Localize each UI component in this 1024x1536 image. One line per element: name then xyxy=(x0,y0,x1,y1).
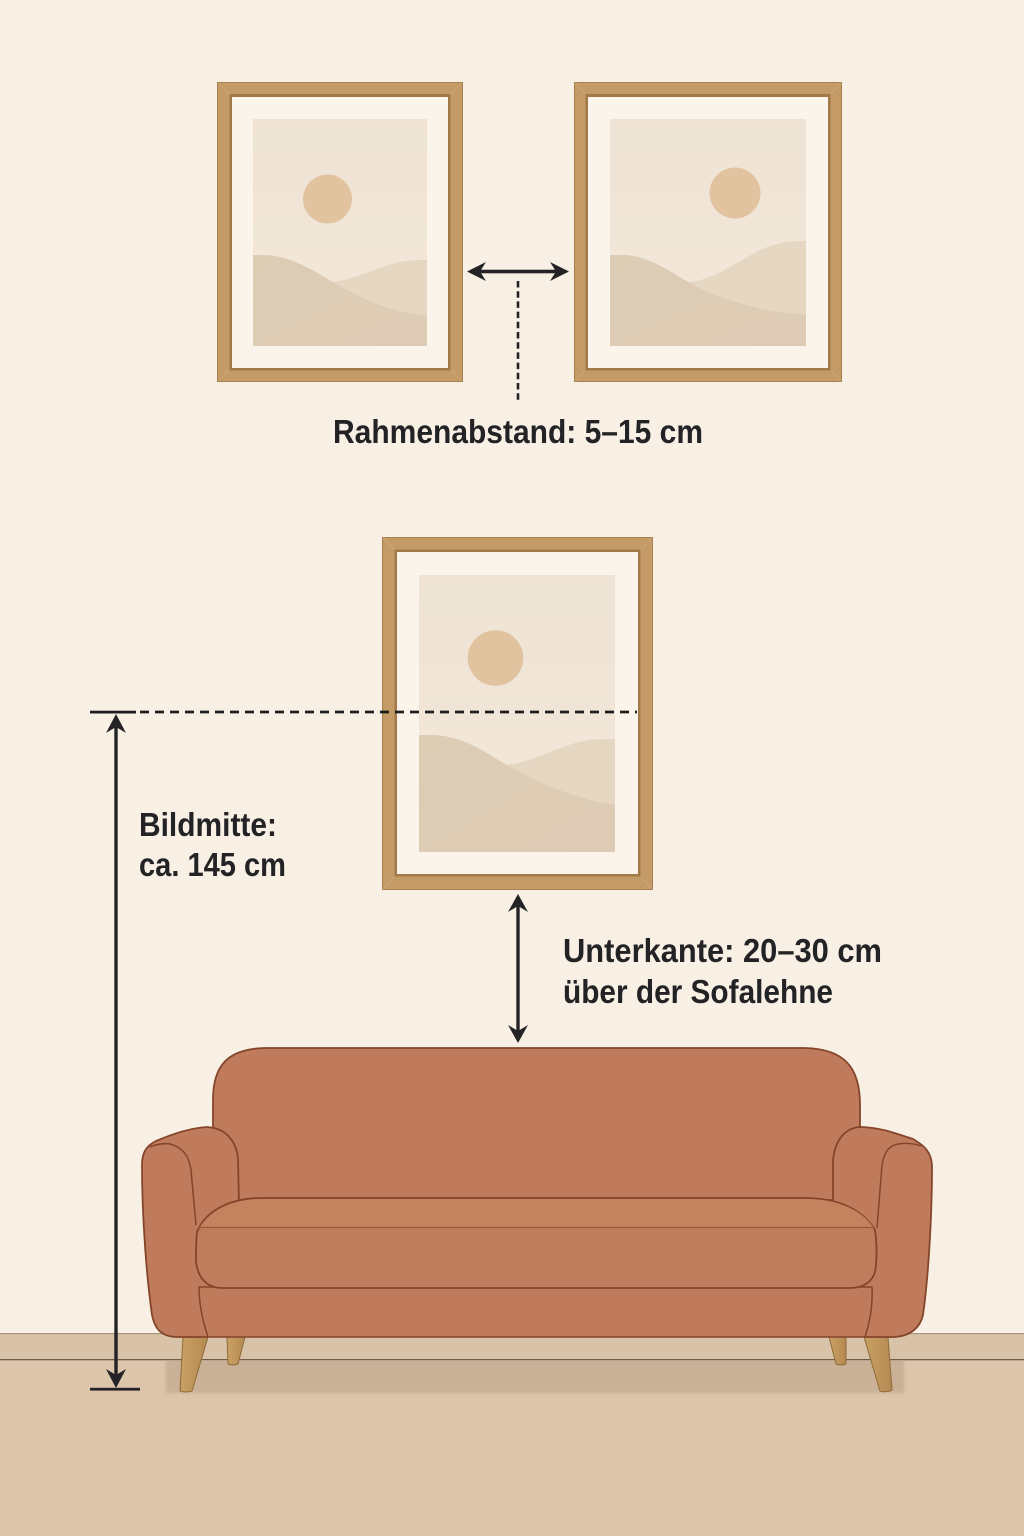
label: picture center height: Bildmitte: xyxy=(139,806,277,843)
frame inner edge xyxy=(586,94,830,370)
sofa backrest xyxy=(213,1048,860,1200)
label: distance above sofa: Unterkante: 20–30 cm xyxy=(563,932,882,969)
front hill xyxy=(610,255,806,346)
back hill xyxy=(688,241,806,330)
cushion top highlight xyxy=(200,1199,873,1227)
art print background xyxy=(419,575,615,852)
label: frame spacing: Rahmenabstand: 5–15 cm xyxy=(333,413,703,450)
sun xyxy=(468,630,523,686)
passepartout xyxy=(232,97,448,368)
label: distance above sofa xyxy=(563,932,882,1010)
back hill xyxy=(505,739,615,820)
floor xyxy=(0,1359,1024,1536)
sofa legs xyxy=(180,1337,892,1392)
frame inner edge xyxy=(230,94,450,370)
back hill xyxy=(332,260,427,330)
center height reference line xyxy=(90,711,637,714)
passepartout xyxy=(588,97,828,368)
label: distance above sofa: über der Sofalehne xyxy=(563,973,833,1010)
right arm seam xyxy=(877,1143,921,1228)
left picture frame xyxy=(218,82,462,382)
frame inner edge xyxy=(394,550,640,876)
center picture frame xyxy=(382,538,652,890)
baseboard xyxy=(0,1333,1024,1361)
vertical gap arrow xyxy=(508,894,528,1043)
art print background xyxy=(253,119,427,346)
horizontal spacing arrow xyxy=(467,262,569,281)
art print background xyxy=(610,119,806,346)
left armrest xyxy=(142,1127,239,1337)
frame mitre corners xyxy=(383,538,652,889)
sun xyxy=(710,168,760,218)
cushion seam xyxy=(199,1226,874,1228)
vertical height arrow xyxy=(90,714,140,1391)
sofa base xyxy=(199,1287,872,1337)
label: picture center height xyxy=(139,806,286,883)
right armrest xyxy=(833,1127,932,1337)
front hill xyxy=(253,255,427,346)
front hill xyxy=(419,735,615,852)
seat cushion xyxy=(196,1198,876,1288)
frame mitre corners xyxy=(218,83,462,381)
left arm seam xyxy=(150,1144,196,1225)
sofa xyxy=(142,1048,932,1392)
frame mitre corners xyxy=(575,83,841,381)
right picture frame xyxy=(574,82,842,382)
sofa floor shadow xyxy=(166,1361,904,1394)
passepartout xyxy=(397,552,638,874)
dashed leader line xyxy=(517,281,519,402)
label: picture center height: ca. 145 cm xyxy=(139,846,286,883)
sun xyxy=(303,174,352,224)
